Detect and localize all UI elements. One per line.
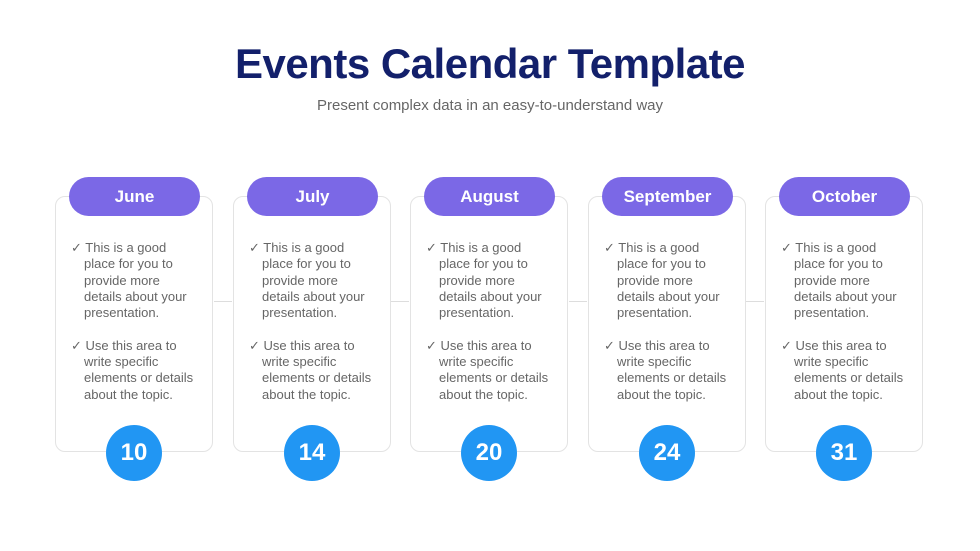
- text: June: presentation.: [84, 305, 159, 320]
- text: October: elements or details: [794, 370, 903, 385]
- date circle 24: 24: [654, 439, 680, 466]
- date circle 24: [639, 425, 695, 481]
- heading: September: September: [624, 187, 711, 206]
- arrow: [391, 301, 409, 302]
- text: October: [781, 240, 903, 402]
- heading: July: July: [295, 187, 330, 206]
- text: September: write specific: [617, 354, 691, 369]
- arrow: [214, 301, 232, 302]
- date circle 31: [816, 425, 872, 481]
- text: July: place for you to: [262, 256, 351, 271]
- panel: October: [765, 196, 923, 452]
- text: October: provide more: [794, 273, 870, 288]
- text: June: place for you to: [84, 256, 173, 271]
- text: July: ✓ Use this area to: [249, 338, 355, 353]
- text: October: presentation.: [794, 305, 869, 320]
- heading: August: August: [460, 187, 519, 206]
- text: July: details about your: [262, 289, 365, 304]
- text: September: [604, 240, 726, 402]
- date circle 14: [284, 425, 340, 481]
- text: August: ✓ Use this area to: [426, 338, 532, 353]
- text: July: ✓ This is a good: [249, 240, 344, 255]
- text: July: presentation.: [262, 305, 337, 320]
- text: October: write specific: [794, 354, 868, 369]
- text: October: ✓ Use this area to: [781, 338, 887, 353]
- date circle 14: 14: [299, 439, 325, 466]
- text: June: ✓ This is a good: [71, 240, 166, 255]
- text: October: about the topic.: [794, 387, 883, 402]
- panel: June: [55, 196, 213, 452]
- date circle 31: 31: [831, 439, 857, 466]
- text: September: about the topic.: [617, 387, 706, 402]
- heading: June: [69, 177, 200, 216]
- arrow: [746, 301, 764, 302]
- text: August: provide more: [439, 273, 515, 288]
- text: June: details about your: [84, 289, 187, 304]
- panel: September: [588, 196, 746, 452]
- text: June: elements or details: [84, 370, 193, 385]
- text: June: [71, 240, 193, 402]
- text: September: details about your: [617, 289, 720, 304]
- date circle 20: [461, 425, 517, 481]
- text: September: presentation.: [617, 305, 692, 320]
- text: August: write specific: [439, 354, 513, 369]
- text: August: elements or details: [439, 370, 548, 385]
- heading: October: October: [812, 187, 877, 206]
- text: September: place for you to: [617, 256, 706, 271]
- text: June: write specific: [84, 354, 158, 369]
- title: Events Calendar Template: [235, 40, 745, 87]
- date circle 10: [106, 425, 162, 481]
- text: August: presentation.: [439, 305, 514, 320]
- text: September: ✓ This is a good: [604, 240, 699, 255]
- text: August: details about your: [439, 289, 542, 304]
- text: August: ✓ This is a good: [426, 240, 521, 255]
- text: July: [249, 240, 371, 402]
- text: July: elements or details: [262, 370, 371, 385]
- heading: June: June: [115, 187, 154, 206]
- text: July: about the topic.: [262, 387, 351, 402]
- date circle 20: 20: [476, 439, 502, 466]
- text: September: elements or details: [617, 370, 726, 385]
- subtitle: Present complex data in an easy-to-understand way: [317, 97, 663, 114]
- heading: July: [247, 177, 378, 216]
- text: June: provide more: [84, 273, 160, 288]
- text: July: provide more: [262, 273, 338, 288]
- text: September: ✓ Use this area to: [604, 338, 710, 353]
- text: October: place for you to: [794, 256, 883, 271]
- text: September: provide more: [617, 273, 693, 288]
- heading: September: [602, 177, 733, 216]
- heading: October: [779, 177, 910, 216]
- date circle 10: 10: [121, 439, 147, 466]
- heading: August: [424, 177, 555, 216]
- text: August: place for you to: [439, 256, 528, 271]
- text: August: about the topic.: [439, 387, 528, 402]
- text: July: write specific: [262, 354, 336, 369]
- text: June: ✓ Use this area to: [71, 338, 177, 353]
- text: October: details about your: [794, 289, 897, 304]
- text: August: [426, 240, 548, 402]
- text: October: ✓ This is a good: [781, 240, 876, 255]
- panel: August: [410, 196, 568, 452]
- arrow: [569, 301, 587, 302]
- text: June: about the topic.: [84, 387, 173, 402]
- panel: July: [233, 196, 391, 452]
